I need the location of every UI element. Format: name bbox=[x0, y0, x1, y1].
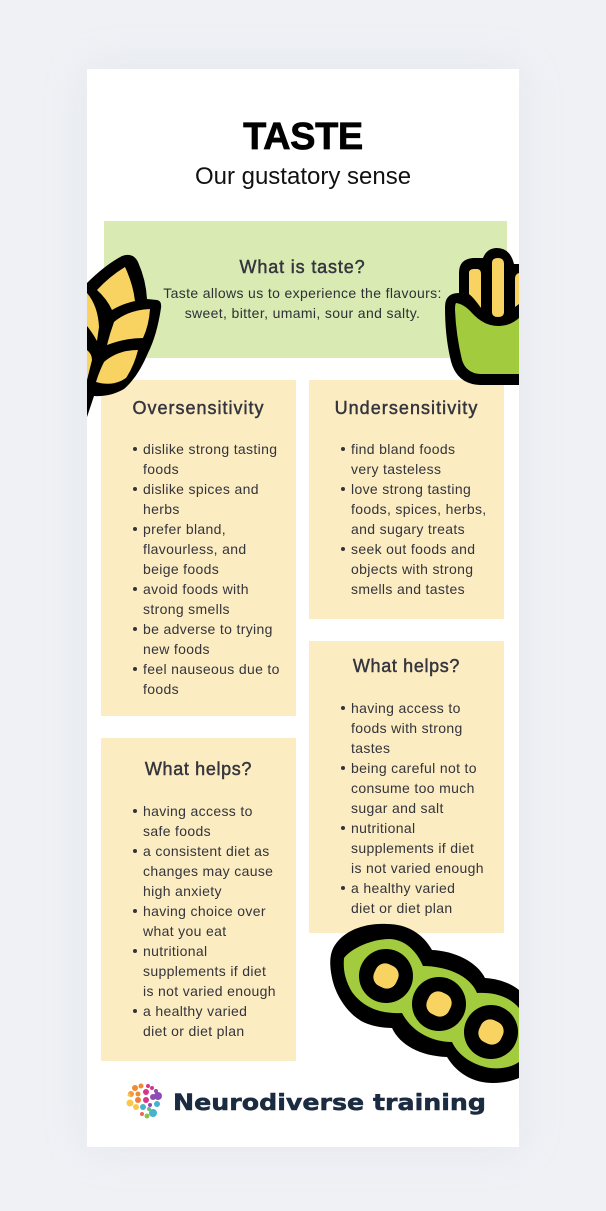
panel: what helps undersensitivity bbox=[309, 641, 504, 933]
list: what helps undersensitivity: being careful not to bbox=[351, 760, 477, 776]
list: what helps oversensitivity: changes may cause bbox=[143, 863, 273, 879]
list: oversensitivity signs: new foods bbox=[143, 641, 210, 657]
list: what helps oversensitivity bbox=[133, 803, 276, 1039]
list: what helps undersensitivity: consume too much bbox=[351, 780, 475, 796]
list: undersensitivity signs: seek out foods and bbox=[351, 541, 475, 557]
list: what helps oversensitivity: nutritional bbox=[143, 943, 207, 959]
icon: brain dots bbox=[126, 1084, 162, 1118]
panel: what helps oversensitivity bbox=[101, 738, 296, 1061]
text: taste description: sweet, bitter, umami, sour and salty. bbox=[185, 305, 420, 321]
list: undersensitivity signs bbox=[341, 441, 487, 597]
heading: what helps: What helps? bbox=[353, 656, 460, 676]
title: TASTE bbox=[243, 116, 363, 158]
pea 2 bbox=[412, 977, 466, 1031]
list: what helps undersensitivity: nutritional bbox=[351, 820, 415, 836]
list: oversensitivity signs: foods bbox=[143, 461, 179, 477]
panel: oversensitivity bbox=[101, 380, 296, 716]
text: Neurodiverse training: Neurodiverse training bbox=[173, 1091, 486, 1116]
list: oversensitivity signs: avoid foods with bbox=[143, 581, 249, 597]
list: what helps oversensitivity: having choice over bbox=[143, 903, 266, 919]
list: what helps oversensitivity: having access to bbox=[143, 803, 253, 819]
heading: oversensitivity: Oversensitivity bbox=[132, 398, 265, 418]
list: what helps oversensitivity: a healthy varied bbox=[143, 1003, 247, 1019]
list: what helps undersensitivity: having access to bbox=[351, 700, 461, 716]
list: what helps undersensitivity: supplements if diet bbox=[351, 840, 474, 856]
card bbox=[87, 69, 519, 1147]
list: what helps undersensitivity: diet or diet plan bbox=[351, 900, 453, 916]
panel: what is taste bbox=[104, 221, 507, 358]
list: what helps oversensitivity: is not varied enough bbox=[143, 983, 276, 999]
list: undersensitivity signs: objects with strong bbox=[351, 561, 473, 577]
list: undersensitivity signs: smells and tastes bbox=[351, 581, 465, 597]
list: oversensitivity signs: prefer bland, bbox=[143, 521, 226, 537]
list: oversensitivity signs: herbs bbox=[143, 501, 180, 517]
list: what helps oversensitivity: supplements if diet bbox=[143, 963, 266, 979]
panel: undersensitivity bbox=[309, 380, 504, 619]
list: what helps undersensitivity: sugar and salt bbox=[351, 800, 444, 816]
pea 3 bbox=[464, 1005, 518, 1059]
list: what helps oversensitivity: high anxiety bbox=[143, 883, 222, 899]
heading: what is taste: What is taste? bbox=[240, 257, 365, 277]
list: undersensitivity signs: love strong tasting bbox=[351, 481, 471, 497]
list: undersensitivity signs: find bland foods bbox=[351, 441, 455, 457]
list: oversensitivity signs: strong smells bbox=[143, 601, 230, 617]
list: what helps oversensitivity: safe foods bbox=[143, 823, 211, 839]
list: what helps undersensitivity: tastes bbox=[351, 740, 390, 756]
list: oversensitivity signs: be adverse to trying bbox=[143, 621, 273, 637]
list: undersensitivity signs: and sugary treats bbox=[351, 521, 465, 537]
heading: undersensitivity: Undersensitivity bbox=[335, 398, 478, 418]
list: what helps undersensitivity: a healthy varied bbox=[351, 880, 455, 896]
pea 1 bbox=[359, 949, 413, 1003]
list: what helps oversensitivity: diet or diet plan bbox=[143, 1023, 245, 1039]
list: oversensitivity signs: flavourless, and bbox=[143, 541, 246, 557]
subtitle: Our gustatory sense bbox=[195, 163, 411, 190]
list: what helps oversensitivity: what you eat bbox=[143, 923, 226, 939]
list: oversensitivity signs: dislike spices and bbox=[143, 481, 259, 497]
list: oversensitivity signs: dislike strong tasting bbox=[143, 441, 277, 457]
list: what helps undersensitivity: foods with strong bbox=[351, 720, 463, 736]
text: taste description bbox=[163, 285, 442, 321]
list: oversensitivity signs: beige foods bbox=[143, 561, 219, 577]
list: undersensitivity signs: foods, spices, herbs, bbox=[351, 501, 487, 517]
list: oversensitivity signs: foods bbox=[143, 681, 179, 697]
list: oversensitivity signs bbox=[133, 441, 280, 697]
list: what helps undersensitivity bbox=[341, 700, 484, 916]
text: taste description: Taste allows us to experience the flavours: bbox=[163, 285, 442, 301]
list: what helps undersensitivity: is not varied enough bbox=[351, 860, 484, 876]
heading: what helps: What helps? bbox=[145, 759, 252, 779]
list: oversensitivity signs: feel nauseous due to bbox=[143, 661, 280, 677]
list: undersensitivity signs: very tasteless bbox=[351, 461, 441, 477]
list: what helps oversensitivity: a consistent diet as bbox=[143, 843, 270, 859]
